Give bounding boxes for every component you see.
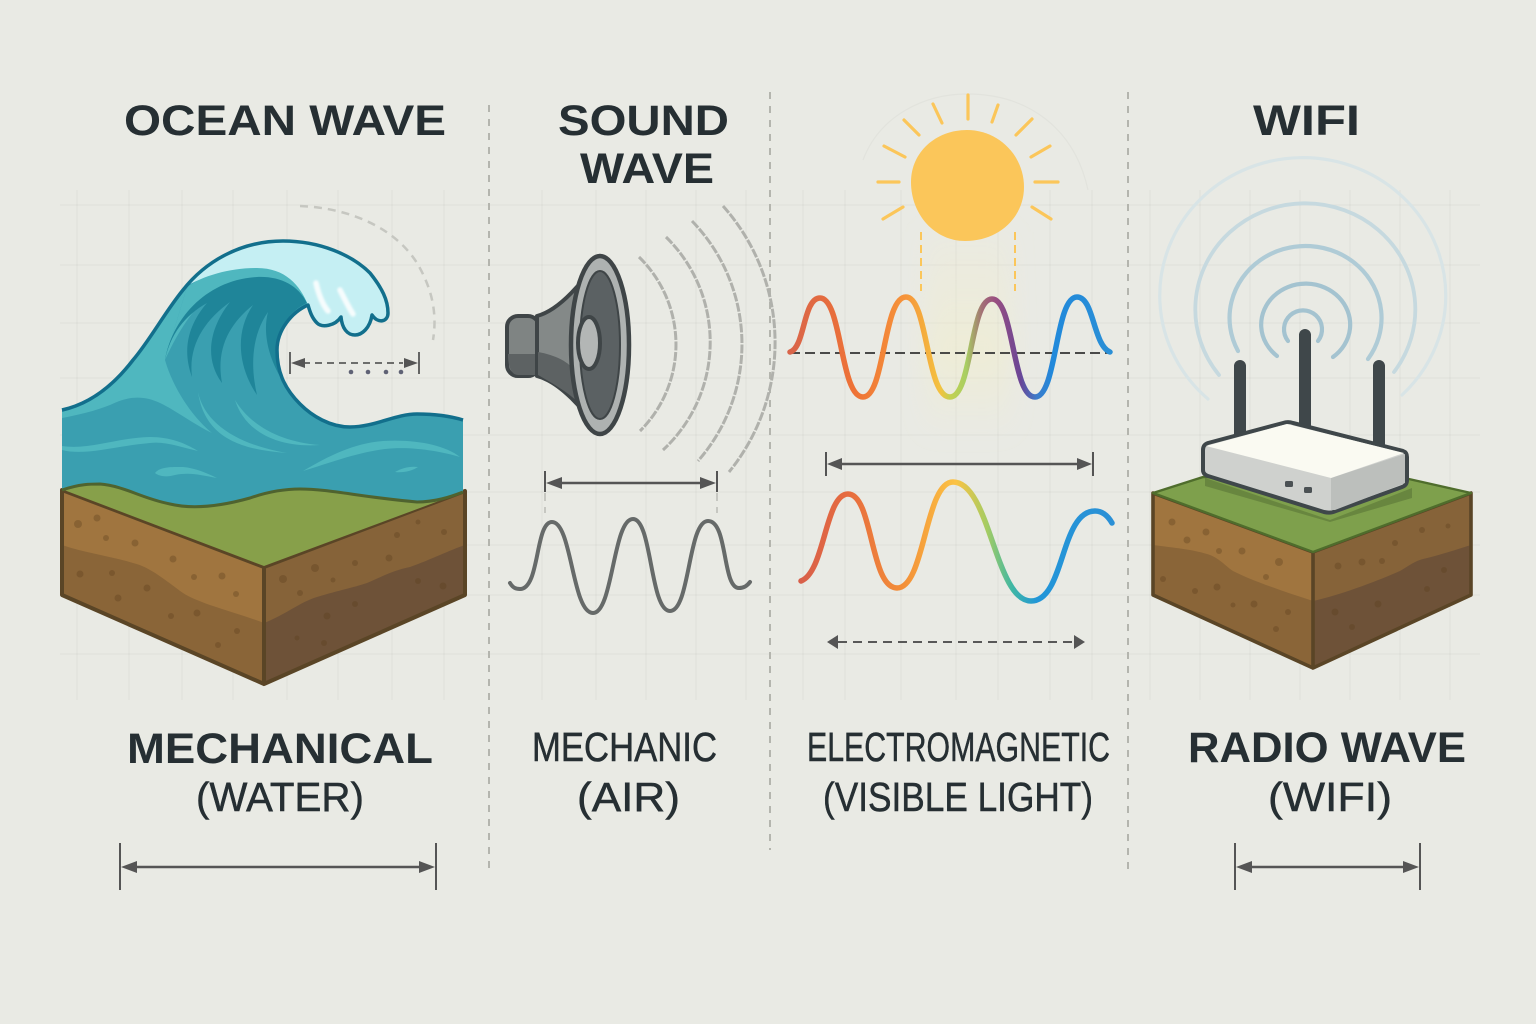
dimension arrow: sound bbox=[545, 471, 717, 513]
panel: visible light bbox=[790, 94, 1112, 820]
icon: router bbox=[1203, 422, 1412, 522]
heading: wifi: WIFI bbox=[1253, 97, 1360, 145]
signal arcs bbox=[1160, 158, 1446, 399]
wave outline bbox=[62, 241, 463, 427]
panel: wifi bbox=[1153, 97, 1471, 890]
divider: light and wifi bbox=[1127, 92, 1129, 870]
label: radio wave (wifi) bbox=[1188, 724, 1466, 820]
label: mechanic (air): MECHANIC bbox=[532, 724, 717, 770]
dashed swell arc bbox=[300, 206, 435, 340]
spectrum wave: long bbox=[801, 482, 1112, 601]
icon: speaker bbox=[507, 256, 629, 434]
light teal face bbox=[62, 287, 212, 433]
wavelength marker: dashed arrow bbox=[290, 352, 419, 374]
dimension arrow: ocean bbox=[120, 843, 436, 890]
heading: sound wave: SOUND bbox=[558, 97, 729, 145]
dashed dimension arrow bbox=[827, 635, 1085, 649]
router antennas bbox=[1240, 335, 1379, 446]
label: radio wave (wifi): (WIFI) bbox=[1268, 774, 1392, 820]
label: mechanic (air) bbox=[532, 724, 717, 820]
dimension arrow: light bbox=[826, 452, 1093, 476]
ocean wave body bbox=[62, 241, 463, 507]
teal strip under foam bbox=[165, 262, 308, 360]
soil block bbox=[62, 490, 465, 684]
heading: ocean wave: OCEAN WAVE bbox=[124, 97, 446, 145]
grass top bbox=[64, 484, 463, 566]
label: mechanical (water): (WATER) bbox=[196, 774, 364, 820]
soil block bbox=[1153, 493, 1471, 668]
faint halo arc bbox=[863, 94, 1088, 190]
water streaks bbox=[62, 392, 460, 478]
sound waveform bbox=[510, 519, 750, 613]
label: mechanical (water) bbox=[127, 725, 433, 820]
baseline bbox=[790, 352, 1110, 354]
grass top bbox=[1153, 477, 1471, 552]
grass edge line bbox=[62, 484, 463, 507]
foam crest bbox=[183, 241, 388, 335]
label: electromagnetic (visible light): (VISIBLE LIGHT) bbox=[823, 774, 1093, 820]
divider: sound and light bbox=[769, 92, 771, 850]
label: mechanic (air): (AIR) bbox=[577, 774, 680, 820]
spectrum wave: short bbox=[790, 297, 1110, 397]
label: radio wave (wifi): RADIO WAVE bbox=[1188, 724, 1466, 772]
divider: ocean and sound bbox=[488, 105, 490, 870]
label: electromagnetic (visible light) bbox=[807, 724, 1110, 820]
heading: sound wave bbox=[558, 97, 729, 193]
foam highlights bbox=[316, 283, 353, 314]
label: mechanical (water): MECHANICAL bbox=[127, 725, 433, 773]
label: electromagnetic (visible light): ELECTROMAGNETIC bbox=[807, 724, 1110, 770]
sound ripple arcs bbox=[639, 206, 775, 472]
heading: sound wave: WAVE bbox=[580, 145, 714, 193]
dark hollow of the wave bbox=[165, 277, 307, 395]
icon: sun bbox=[878, 95, 1058, 291]
panel: ocean wave bbox=[62, 97, 465, 890]
light glow bbox=[925, 232, 1011, 437]
panel: sound wave bbox=[507, 97, 775, 820]
dimension arrow: wifi bbox=[1235, 843, 1420, 890]
